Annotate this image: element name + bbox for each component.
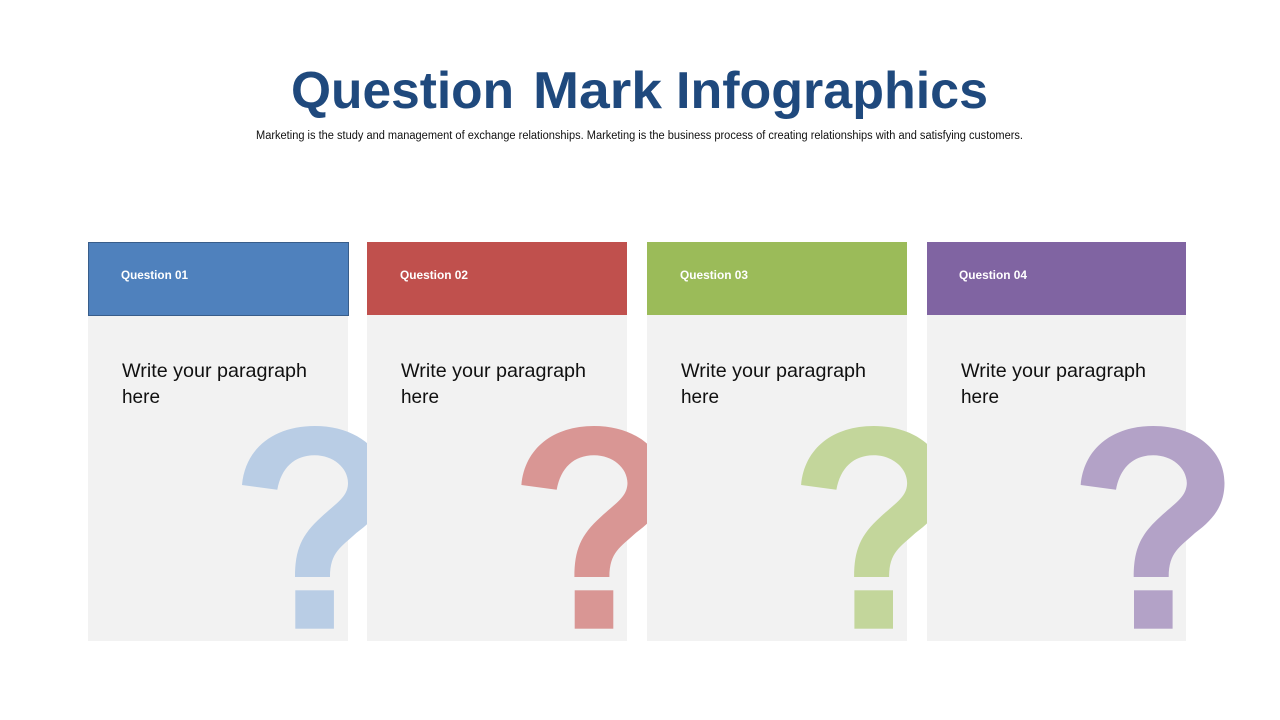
paragraph 02: here (401, 387, 439, 408)
paragraph 04 (961, 361, 1146, 408)
title: Mark (533, 62, 662, 120)
header 02 (367, 242, 627, 315)
panel: question 01 (88, 242, 386, 641)
paragraph 01 (122, 361, 307, 408)
panel body 03 (647, 315, 907, 641)
panel: question 02 (367, 242, 665, 641)
subtitle: Marketing is the study and management of exchange relationships. Marketing is the business process of creating relationships with and satisfying customers. (256, 130, 1023, 142)
paragraph 04: Write your paragraph (961, 361, 1146, 382)
paragraph 01: Write your paragraph (122, 361, 307, 382)
panel body 02 (367, 315, 627, 641)
panel: question 03 (647, 242, 945, 641)
icon: question mark 01 (242, 426, 386, 629)
icon: question mark 03 (801, 426, 945, 629)
paragraph 01: here (122, 387, 160, 408)
header 04 (927, 242, 1186, 315)
heading 04: Question 04 (959, 270, 1028, 282)
paragraph 03 (681, 361, 866, 408)
title: Question (291, 62, 514, 120)
header 01 (88, 242, 348, 316)
header 03 (647, 242, 907, 315)
panel body 01 (88, 315, 348, 641)
panel body 04 (927, 315, 1186, 641)
panel: question 04 (927, 242, 1224, 641)
heading 01: Question 01 (121, 270, 189, 282)
paragraph 02 (401, 361, 586, 408)
icon: question mark 02 (521, 426, 665, 629)
title: Infographics (676, 62, 988, 120)
paragraph 04: here (961, 387, 999, 408)
heading 02: Question 02 (400, 270, 468, 282)
icon: question mark 04 (1081, 426, 1224, 629)
heading 03: Question 03 (680, 270, 748, 282)
paragraph 02: Write your paragraph (401, 361, 586, 382)
paragraph 03: Write your paragraph (681, 361, 866, 382)
paragraph 03: here (681, 387, 719, 408)
